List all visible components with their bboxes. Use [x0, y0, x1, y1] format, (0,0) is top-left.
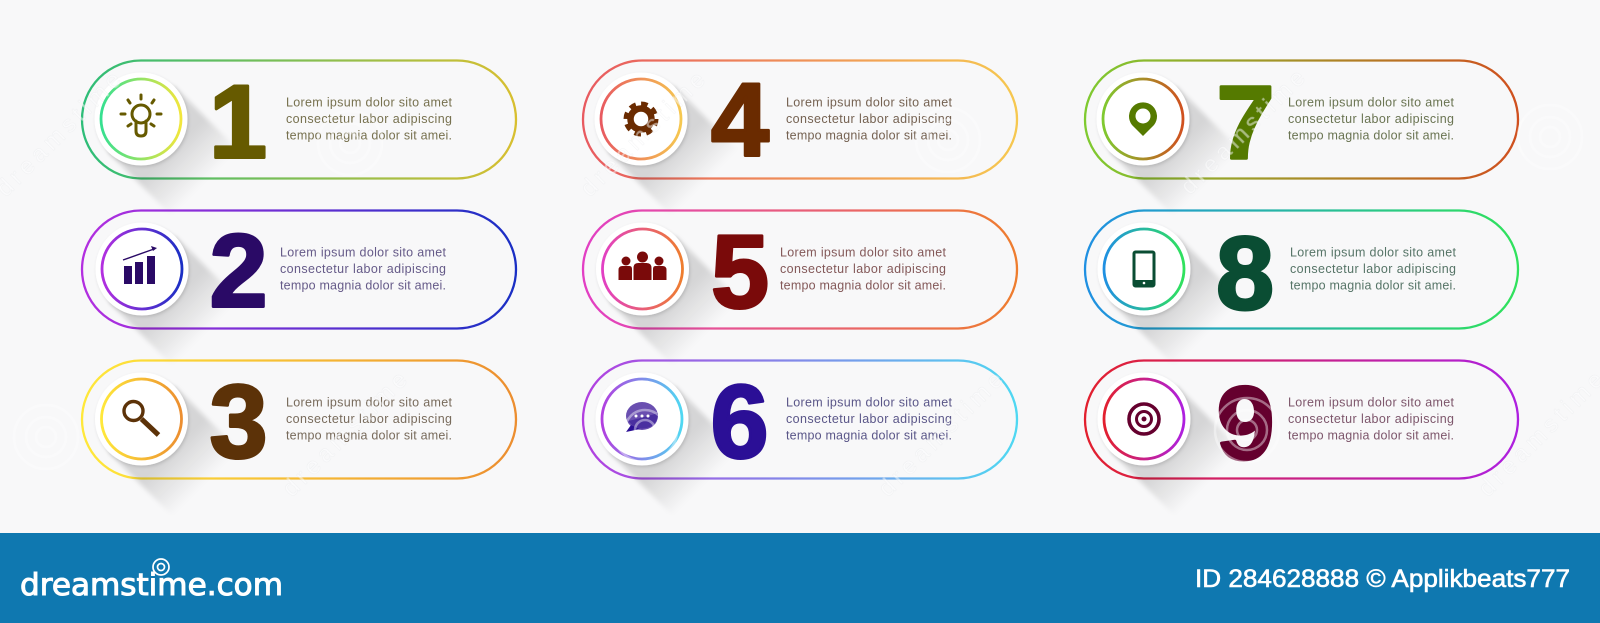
number 3: 3 — [210, 364, 267, 480]
card 5 — [583, 210, 1017, 377]
pill outline 8 — [1085, 210, 1518, 328]
text 1: Lorem ipsum dolor sito amet — [286, 96, 453, 110]
footer credit: ID 284628888 © Applikbeats777 — [1195, 565, 1570, 593]
badge 9 — [1098, 372, 1190, 466]
icon: magnifier — [124, 402, 158, 435]
long shadow 4 — [608, 86, 749, 227]
text 1: consectetur labor adipiscing — [286, 112, 452, 126]
icon: gear — [626, 104, 656, 134]
card 7 — [1085, 60, 1518, 227]
text 4: consectetur labor adipiscing — [786, 112, 952, 126]
number 7: 7 — [1217, 66, 1274, 182]
number 9: 9 — [1217, 366, 1274, 482]
badge 5 — [596, 222, 689, 316]
badge 3 — [95, 372, 188, 466]
long shadow 8 — [1111, 236, 1252, 377]
pill outline 1 — [82, 60, 516, 178]
text 3: tempo magnia dolor sit amei. — [286, 428, 452, 442]
text 8: tempo magnia dolor sit amei. — [1290, 278, 1456, 292]
card 3 — [82, 360, 516, 527]
text 8: Lorem ipsum dolor sito amet — [1290, 246, 1457, 260]
icon: smartphone — [1134, 252, 1154, 286]
icon: bar chart — [123, 246, 157, 284]
footer bar — [0, 533, 1600, 623]
watermark text: dreamstime — [1175, 64, 1311, 200]
pill outline 4 — [583, 60, 1017, 178]
text 9: tempo magnia dolor sit amei. — [1288, 428, 1454, 442]
long shadow 9 — [1111, 386, 1252, 527]
text 7: tempo magnia dolor sit amei. — [1288, 128, 1454, 142]
badge 6 — [596, 372, 688, 466]
badge 4 — [594, 72, 688, 166]
number 6: 6 — [711, 364, 768, 480]
text 5: Lorem ipsum dolor sito amet — [780, 246, 947, 260]
card 4 — [583, 60, 1017, 227]
pill outline 2 — [82, 210, 516, 328]
text 3: consectetur labor adipiscing — [286, 412, 452, 426]
watermark text: dreamstime — [873, 366, 1009, 502]
text 2: consectetur labor adipiscing — [280, 262, 446, 276]
number 8: 8 — [1216, 216, 1274, 332]
text 4: tempo magnia dolor sit amei. — [786, 128, 952, 142]
watermark text — [0, 64, 1600, 502]
watermark text: dreamstime — [575, 66, 711, 202]
icon: chat bubble — [626, 402, 658, 432]
text 3: Lorem ipsum dolor sito amet — [286, 396, 453, 410]
text 2: tempo magnia dolor sit amei. — [280, 278, 446, 292]
long shadow 1 — [108, 86, 249, 227]
text 7: consectetur labor adipiscing — [1288, 112, 1454, 126]
long shadow 2 — [109, 236, 250, 377]
watermark spirals — [14, 105, 1582, 469]
long shadow 6 — [609, 386, 750, 527]
icon: target — [1129, 404, 1159, 434]
icon: logo spiral — [153, 559, 169, 575]
long shadow 5 — [610, 236, 750, 377]
badge 7 — [1096, 72, 1190, 166]
text 6: consectetur labor adipiscing — [786, 412, 952, 426]
badge 1 — [94, 72, 188, 166]
long shadow 3 — [108, 386, 250, 527]
text 6: tempo magnia dolor sit amei. — [786, 428, 952, 442]
number 1: 1 — [209, 64, 267, 180]
badge 2 — [96, 222, 188, 316]
text 8: consectetur labor adipiscing — [1290, 262, 1456, 276]
pill outline 7 — [1085, 60, 1518, 178]
text 4: Lorem ipsum dolor sito amet — [786, 96, 953, 110]
card 8 — [1085, 210, 1518, 377]
pill outline 9 — [1085, 360, 1518, 478]
number 5: 5 — [711, 214, 769, 330]
footer logo: dreamstime.com — [20, 568, 283, 603]
card 9 — [1085, 360, 1518, 527]
text 1: tempo magnia dolor sit amei. — [286, 128, 452, 142]
card 6 — [583, 360, 1017, 527]
pill outline 3 — [82, 360, 516, 478]
text 9: consectetur labor adipiscing — [1288, 412, 1454, 426]
text 7: Lorem ipsum dolor sito amet — [1288, 96, 1455, 110]
icon: light bulb — [121, 95, 161, 136]
text 5: consectetur labor adipiscing — [780, 262, 946, 276]
badge 8 — [1098, 222, 1190, 316]
number 4: 4 — [711, 62, 769, 178]
pill outline 5 — [583, 210, 1017, 328]
number 2: 2 — [210, 214, 267, 330]
watermark text: dreamstime — [277, 366, 413, 502]
card 2 — [82, 210, 516, 377]
text 6: Lorem ipsum dolor sito amet — [786, 396, 953, 410]
pill outline 6 — [583, 360, 1017, 478]
text 2: Lorem ipsum dolor sito amet — [280, 246, 447, 260]
icon: people — [618, 252, 666, 280]
watermark overlay — [0, 64, 1600, 502]
icon: map pin — [1129, 102, 1157, 136]
card 1 — [82, 60, 516, 227]
text 9: Lorem ipsum dolor sito amet — [1288, 396, 1455, 410]
long shadow 7 — [1110, 86, 1251, 227]
text 5: tempo magnia dolor sit amei. — [780, 278, 946, 292]
